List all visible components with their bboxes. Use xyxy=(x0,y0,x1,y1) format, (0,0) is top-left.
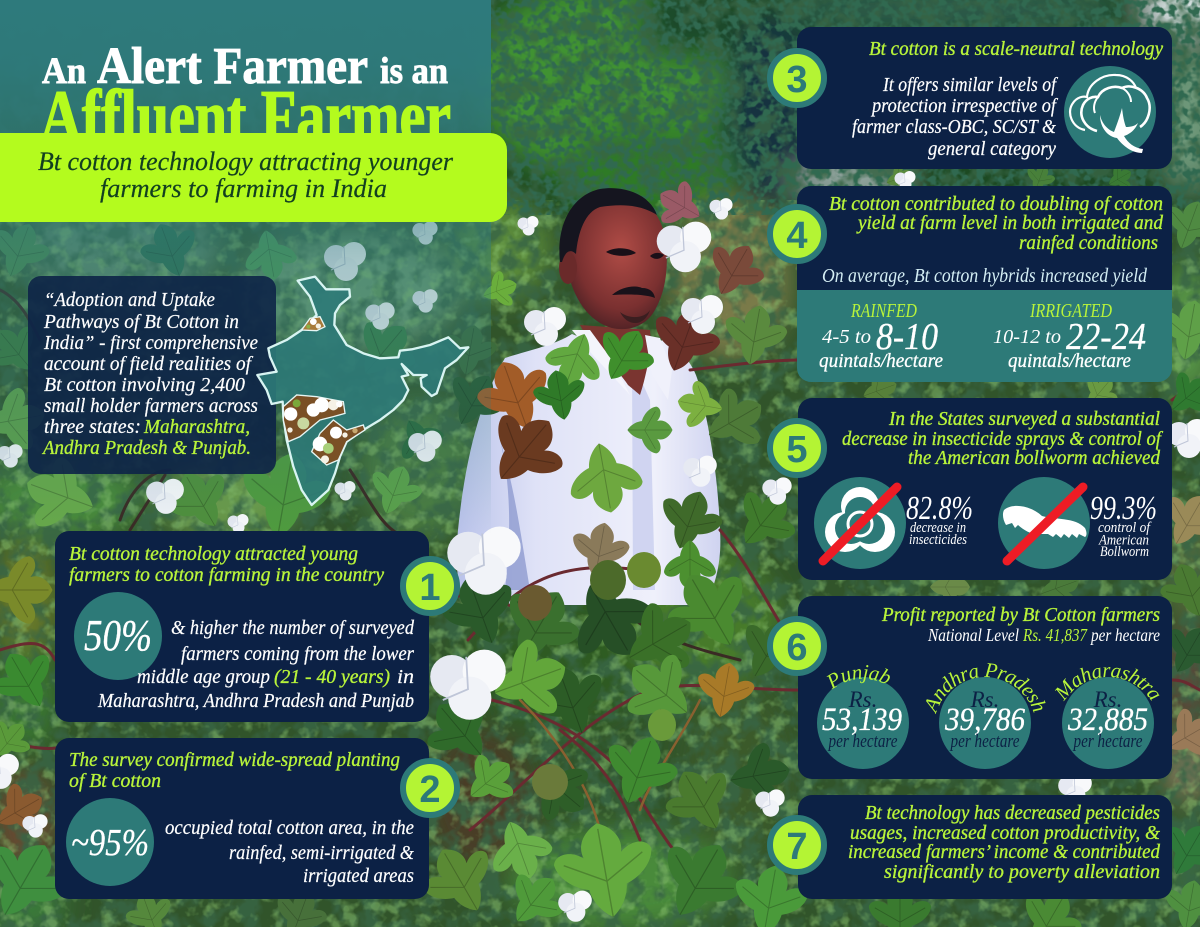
panel 6: profit by state: per hectare xyxy=(1089,625,1160,645)
panel 4: doubling of yield: On average, Bt cotton hybrids increased yield xyxy=(822,265,1148,287)
panel: study description: three states: xyxy=(44,416,141,438)
panel 2: wide-spread planting: rainfed, semi-irrigated & xyxy=(229,842,414,864)
irrigated yield xyxy=(993,300,1146,372)
subtitle banner xyxy=(0,133,507,222)
title xyxy=(40,38,451,158)
panel 1: young farmers: & higher the number of surveyed xyxy=(171,617,415,639)
panel: study description: India” - first comprehensive xyxy=(43,332,258,354)
number badge 1: 1 xyxy=(419,567,441,609)
panel 2: wide-spread planting xyxy=(55,738,429,899)
panel 1: young farmers: farmers to cotton farming in the country xyxy=(69,564,384,586)
panel 2: wide-spread planting: of Bt cotton xyxy=(69,770,161,792)
number badge 7 xyxy=(770,818,824,872)
map of India with cotton-growing states xyxy=(257,277,468,505)
number badge 5: 5 xyxy=(786,429,808,471)
Maharashtra profit: 32,885 xyxy=(1067,702,1148,738)
Punjab profit: Punjab xyxy=(826,665,890,690)
icon: crossed biohazard xyxy=(814,477,906,569)
Punjab cotton patch xyxy=(302,317,325,331)
panel: study description: Andhra Pradesh & Punjab. xyxy=(41,437,251,459)
number badge 5 xyxy=(770,421,824,475)
stat: 99.3% control of American Bollworm: control of xyxy=(1098,520,1152,536)
title: is an xyxy=(380,51,448,92)
Punjab profit xyxy=(817,665,909,769)
panel 4: doubling of yield: rainfed conditions xyxy=(1019,232,1158,254)
irrigated yield: 22-24 xyxy=(1066,316,1146,358)
Andhra Pradesh profit: per hectare xyxy=(949,731,1020,752)
number badge 6 xyxy=(770,619,824,673)
icon: crossed bollworm xyxy=(998,477,1090,569)
stat circle: 50% xyxy=(74,592,162,680)
rainfed yield: RAINFED xyxy=(850,300,917,322)
rainfed yield: 4-5 to xyxy=(822,326,871,348)
panel 1: young farmers: (21 - 40 years) xyxy=(274,666,390,688)
stat: 82.8% decrease in insecticides xyxy=(906,490,973,548)
subtitle banner: Bt cotton technology attracting younger xyxy=(38,147,454,176)
panel 4: doubling of yield: yield at farm level in both irrigated and xyxy=(856,212,1164,234)
panel 3: scale-neutral technology: Bt cotton is a scale-neutral technology xyxy=(869,38,1163,60)
Andhra Pradesh profit: Andhra Pradesh xyxy=(926,663,1046,714)
stat: 82.8% decrease in insecticides: decrease in xyxy=(910,520,966,536)
Maharashtra cotton patch xyxy=(283,395,345,442)
stat: 82.8% decrease in insecticides: insecticides xyxy=(909,532,967,548)
panel 4: doubling of yield xyxy=(797,186,1172,382)
farmer xyxy=(457,188,720,605)
icon: cotton boll xyxy=(1064,66,1156,158)
number badge 4 xyxy=(770,207,824,261)
panel 3: scale-neutral technology: farmer class-OBC, SC/ST & xyxy=(852,116,1056,138)
panel 1: young farmers: farmers coming from the lower xyxy=(181,643,414,665)
panel: study description: Pathways of Bt Cotton in xyxy=(43,311,239,333)
number badge 1 xyxy=(403,559,457,613)
panel 6: profit by state: Rs. 41,837 xyxy=(1022,625,1088,645)
Punjab profit: per hectare xyxy=(827,731,898,752)
irrigated yield: IRRIGATED xyxy=(1029,300,1112,322)
Andhra Pradesh profit: Rs. xyxy=(970,687,999,712)
panel: study description: account of field realities of xyxy=(44,353,253,375)
number badge 3 xyxy=(770,51,824,105)
rainfed yield: quintals/hectare xyxy=(819,350,943,372)
Maharashtra profit: per hectare xyxy=(1072,731,1142,752)
panel 7: conclusion: significantly to poverty alleviation xyxy=(884,861,1160,883)
panel 6: profit by state: National Level xyxy=(927,625,1019,645)
rainfed yield: 8-10 xyxy=(876,316,938,358)
Maharashtra profit: Rs. xyxy=(1093,687,1122,712)
panel 1: young farmers: Maharashtra, Andhra Pradesh and Punjab xyxy=(97,690,414,712)
panel: study description: small holder farmers across xyxy=(44,395,258,417)
number badge 2: 2 xyxy=(419,769,441,811)
panel 1: young farmers xyxy=(55,531,429,722)
stat: 99.3% control of American Bollworm xyxy=(1090,490,1157,560)
irrigated yield: 10-12 to xyxy=(993,326,1061,348)
panel 1: young farmers: in xyxy=(397,666,414,688)
Andhra Pradesh profit: 39,786 xyxy=(944,702,1025,738)
panel: study description: Bt cotton involving 2,400 xyxy=(44,374,245,396)
Andhra Pradesh profit xyxy=(926,663,1046,769)
panel: study description: Maharashtra, xyxy=(143,416,250,438)
stat circle: ~95% xyxy=(66,798,154,886)
number badge 6: 6 xyxy=(786,627,808,669)
title: Affluent Farmer xyxy=(40,76,451,158)
stat circle: ~95%: ~95% xyxy=(71,822,149,864)
number badge 3: 3 xyxy=(786,59,808,101)
panel 4: doubling of yield: Bt cotton contributed to doubling of cotton xyxy=(829,193,1163,215)
stat: 99.3% control of American Bollworm: 99.3% xyxy=(1090,490,1157,527)
stat: 99.3% control of American Bollworm: American xyxy=(1098,532,1149,548)
Punjab profit: 53,139 xyxy=(822,702,902,738)
panel: study description xyxy=(28,276,276,474)
panel 2: wide-spread planting: The survey confirmed wide-spread planting xyxy=(69,749,400,771)
stat: 99.3% control of American Bollworm: Bollworm xyxy=(1100,544,1149,560)
Andhra Pradesh cotton patch xyxy=(312,420,365,465)
panel: study description: “Adoption and Uptake xyxy=(44,289,215,311)
developing cotton buds xyxy=(518,552,676,800)
Maharashtra profit xyxy=(1055,667,1160,769)
title: An xyxy=(42,51,86,92)
panel 1: young farmers: Bt cotton technology attracted young xyxy=(69,543,358,565)
Punjab profit: Rs. xyxy=(848,687,877,712)
panel 1: young farmers: middle age group xyxy=(137,666,270,688)
panel 3: scale-neutral technology: It offers similar levels of xyxy=(882,74,1058,96)
panel 5: insecticide decrease xyxy=(798,398,1172,580)
Maharashtra profit: Maharashtra xyxy=(1055,667,1160,702)
panel 5: insecticide decrease: the American bollworm achieved xyxy=(908,447,1161,469)
panel 3: scale-neutral technology: general category xyxy=(928,138,1056,160)
panel 2: wide-spread planting: occupied total cotton area, in the xyxy=(165,817,414,839)
panel 7: conclusion xyxy=(798,795,1172,899)
rainfed yield xyxy=(819,300,943,372)
panel 3: scale-neutral technology xyxy=(797,27,1172,169)
panel 5: insecticide decrease: In the States surveyed a substantial xyxy=(888,408,1160,430)
number badge 2 xyxy=(403,761,457,815)
panel 5: insecticide decrease: decrease in insecticide sprays & control of xyxy=(842,428,1163,450)
panel 3: scale-neutral technology: protection irrespective of xyxy=(870,95,1058,117)
stat circle: 50%: 50% xyxy=(84,611,152,660)
number badge 4: 4 xyxy=(786,215,808,257)
panel 7: conclusion: usages, increased cotton productivity, & xyxy=(850,822,1160,844)
panel 7: conclusion: Bt technology has decreased pesticides xyxy=(865,802,1160,824)
cotton branches xyxy=(0,290,1200,880)
panel 6: profit by state xyxy=(798,596,1172,779)
teal overlay: left column xyxy=(0,0,491,535)
irrigated yield: quintals/hectare xyxy=(1008,350,1131,372)
panel 2: wide-spread planting: irrigated areas xyxy=(303,865,414,887)
panel 7: conclusion: increased farmers’ income & contributed xyxy=(848,841,1161,863)
stat: 82.8% decrease in insecticides: 82.8% xyxy=(906,490,973,527)
number badge 7: 7 xyxy=(786,826,808,868)
title: Alert Farmer xyxy=(97,38,368,95)
panel 6: profit by state: Profit reported by Bt Cotton farmers xyxy=(881,604,1160,626)
subtitle banner: farmers to farming in India xyxy=(100,174,387,203)
